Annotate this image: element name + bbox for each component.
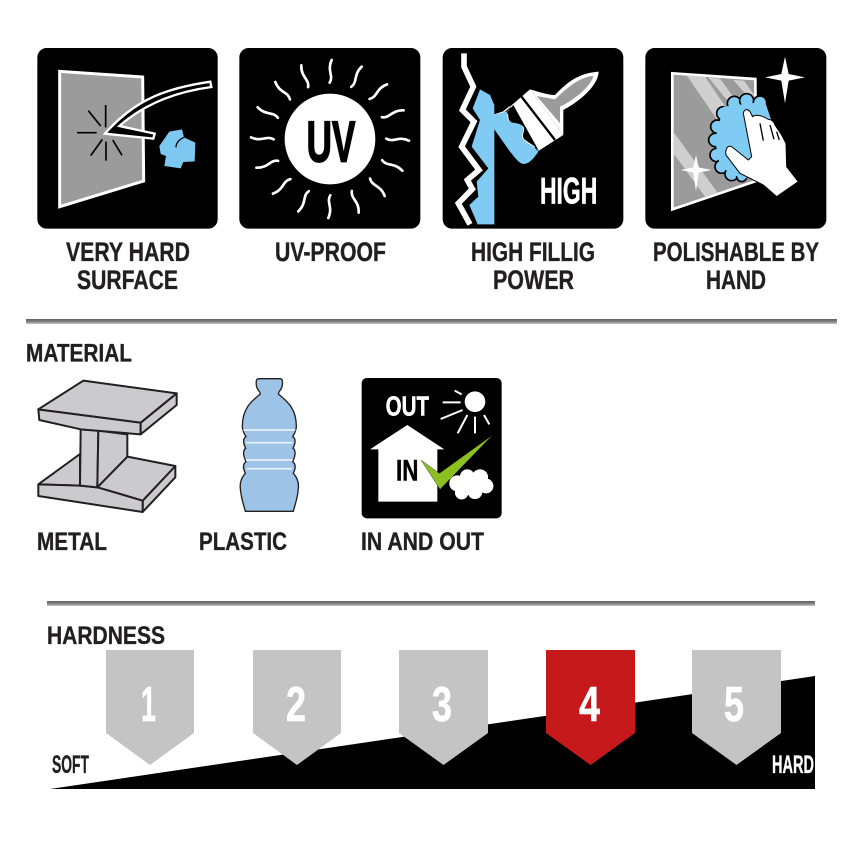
scale marker 3: 3 <box>432 678 452 732</box>
scale marker 3 <box>399 650 488 765</box>
label: metal: METAL <box>37 528 107 556</box>
brush handle <box>530 72 599 135</box>
icon: metal I-beam <box>38 381 177 512</box>
panel: high filling power icon: HIGH <box>540 170 597 212</box>
caption: polishable by hand <box>653 237 819 295</box>
icon: in and out: IN <box>396 454 418 487</box>
scale marker 5 <box>692 650 781 765</box>
sparkle small <box>681 155 712 192</box>
scale marker 1: 1 <box>141 678 156 732</box>
caption: polishable by hand: POLISHABLE BY <box>653 237 819 267</box>
panel: very hard surface icon <box>37 48 218 229</box>
label: hard: HARD <box>772 751 814 779</box>
chart: hardness wedge <box>50 676 815 789</box>
icon: in and out: OUT <box>386 390 429 421</box>
cloud <box>449 469 494 500</box>
label: in and out: IN AND OUT <box>361 528 484 556</box>
icon: plastic bottle <box>240 379 298 511</box>
scale marker 4 (selected) <box>546 650 635 765</box>
paint <box>493 112 538 164</box>
caption: very hard surface <box>66 237 190 295</box>
cloth <box>709 94 773 182</box>
label: soft: SOFT <box>52 751 89 779</box>
heading: material: MATERIAL <box>26 340 132 368</box>
scale marker 2: 2 <box>286 678 306 732</box>
caption: high fillig power: POWER <box>493 265 574 295</box>
panel: UV-proof icon <box>239 48 420 229</box>
hand <box>726 110 798 197</box>
scale marker 4 (selected): 4 <box>579 678 600 732</box>
icon: in and out <box>362 378 502 518</box>
scale marker 2 <box>253 650 341 765</box>
heading: hardness: HARDNESS <box>47 622 165 650</box>
caption: high fillig power <box>471 237 595 295</box>
scale marker 1 <box>106 650 194 765</box>
panel: UV-proof icon: UV <box>307 111 355 175</box>
panel: high filling power icon <box>443 48 623 229</box>
brush ferrule <box>510 89 563 151</box>
label: plastic: PLASTIC <box>199 528 287 556</box>
scale marker 5: 5 <box>724 678 744 732</box>
sparkle large <box>765 57 805 103</box>
caption: polishable by hand: HAND <box>706 265 766 295</box>
caption: high fillig power: HIGH FILLIG <box>471 237 595 267</box>
panel: polishable by hand icon <box>645 48 826 229</box>
caption: very hard surface: VERY HARD <box>66 237 190 267</box>
caption: UV-proof: UV-PROOF <box>275 237 386 267</box>
caption: very hard surface: SURFACE <box>77 265 178 295</box>
